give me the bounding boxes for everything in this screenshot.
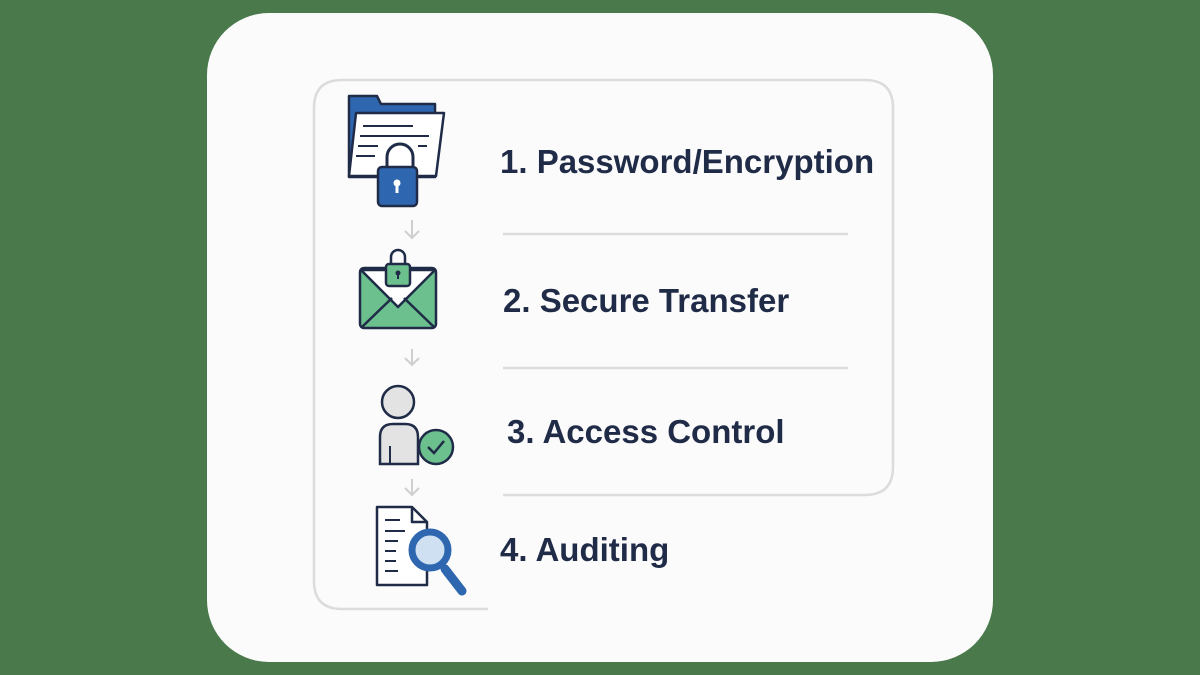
text 4: 4. Auditing — [500, 531, 669, 568]
text 3: 3. Access Control — [507, 413, 785, 450]
arrow 1 — [405, 220, 419, 238]
text 2: 2. Secure Transfer — [503, 282, 789, 319]
arrow 2 — [405, 349, 419, 365]
icon: document with magnifier — [377, 507, 462, 591]
arrow 3 — [405, 479, 419, 495]
icon: folder with lock — [349, 96, 444, 206]
card — [207, 13, 993, 662]
panel outline — [314, 80, 893, 609]
text 1: 1. Password/Encryption — [500, 143, 874, 180]
icon: envelope with lock — [360, 250, 436, 328]
icon: user with check — [380, 386, 453, 464]
